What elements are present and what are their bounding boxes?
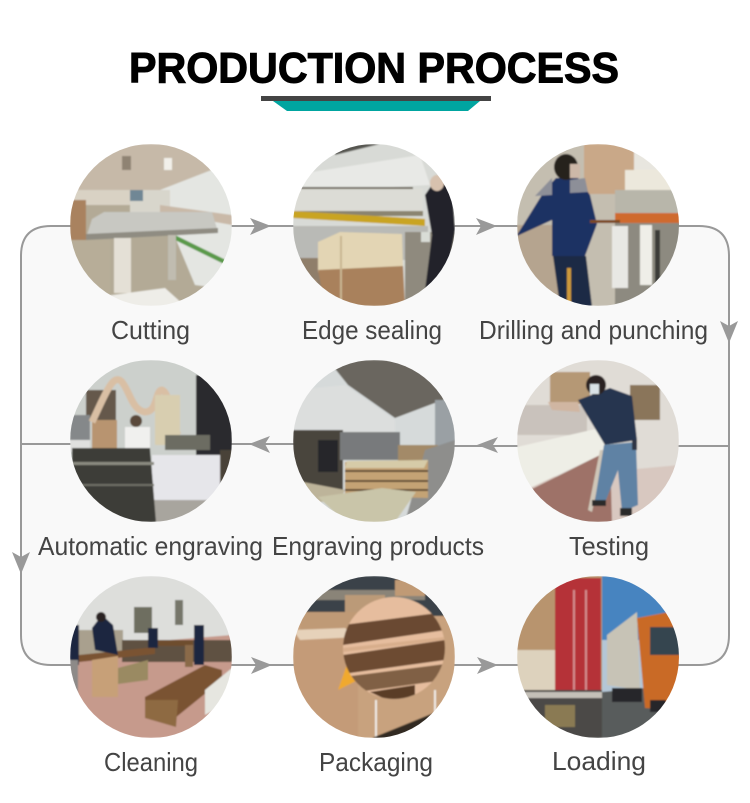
photo: edge sealing	[293, 144, 455, 306]
arrows	[12, 218, 738, 674]
photo: testing	[517, 360, 680, 522]
label: cleaning: Cleaning	[104, 747, 198, 777]
photo: automatic engraving	[70, 360, 232, 522]
photo: packaging	[293, 576, 455, 738]
label: packaging: Packaging	[319, 747, 433, 777]
title: PRODUCTION PROCESS	[129, 46, 619, 92]
photo: engraving products	[293, 360, 455, 522]
label: engraving products: Engraving products	[272, 531, 484, 561]
label: automatic engraving: Automatic engraving	[38, 531, 263, 561]
photo: cleaning	[70, 576, 232, 738]
title underline	[261, 96, 491, 111]
photo: cutting	[70, 144, 232, 306]
photo: drilling and punching	[517, 144, 680, 306]
label: testing: Testing	[569, 531, 649, 561]
label: loading: Loading	[552, 746, 646, 776]
photo: loading	[517, 576, 680, 738]
process flow path	[21, 226, 729, 665]
label: edge sealing: Edge sealing	[302, 315, 442, 345]
label: cutting: Cutting	[111, 315, 190, 345]
label: drilling and punching: Drilling and punching	[479, 315, 708, 345]
